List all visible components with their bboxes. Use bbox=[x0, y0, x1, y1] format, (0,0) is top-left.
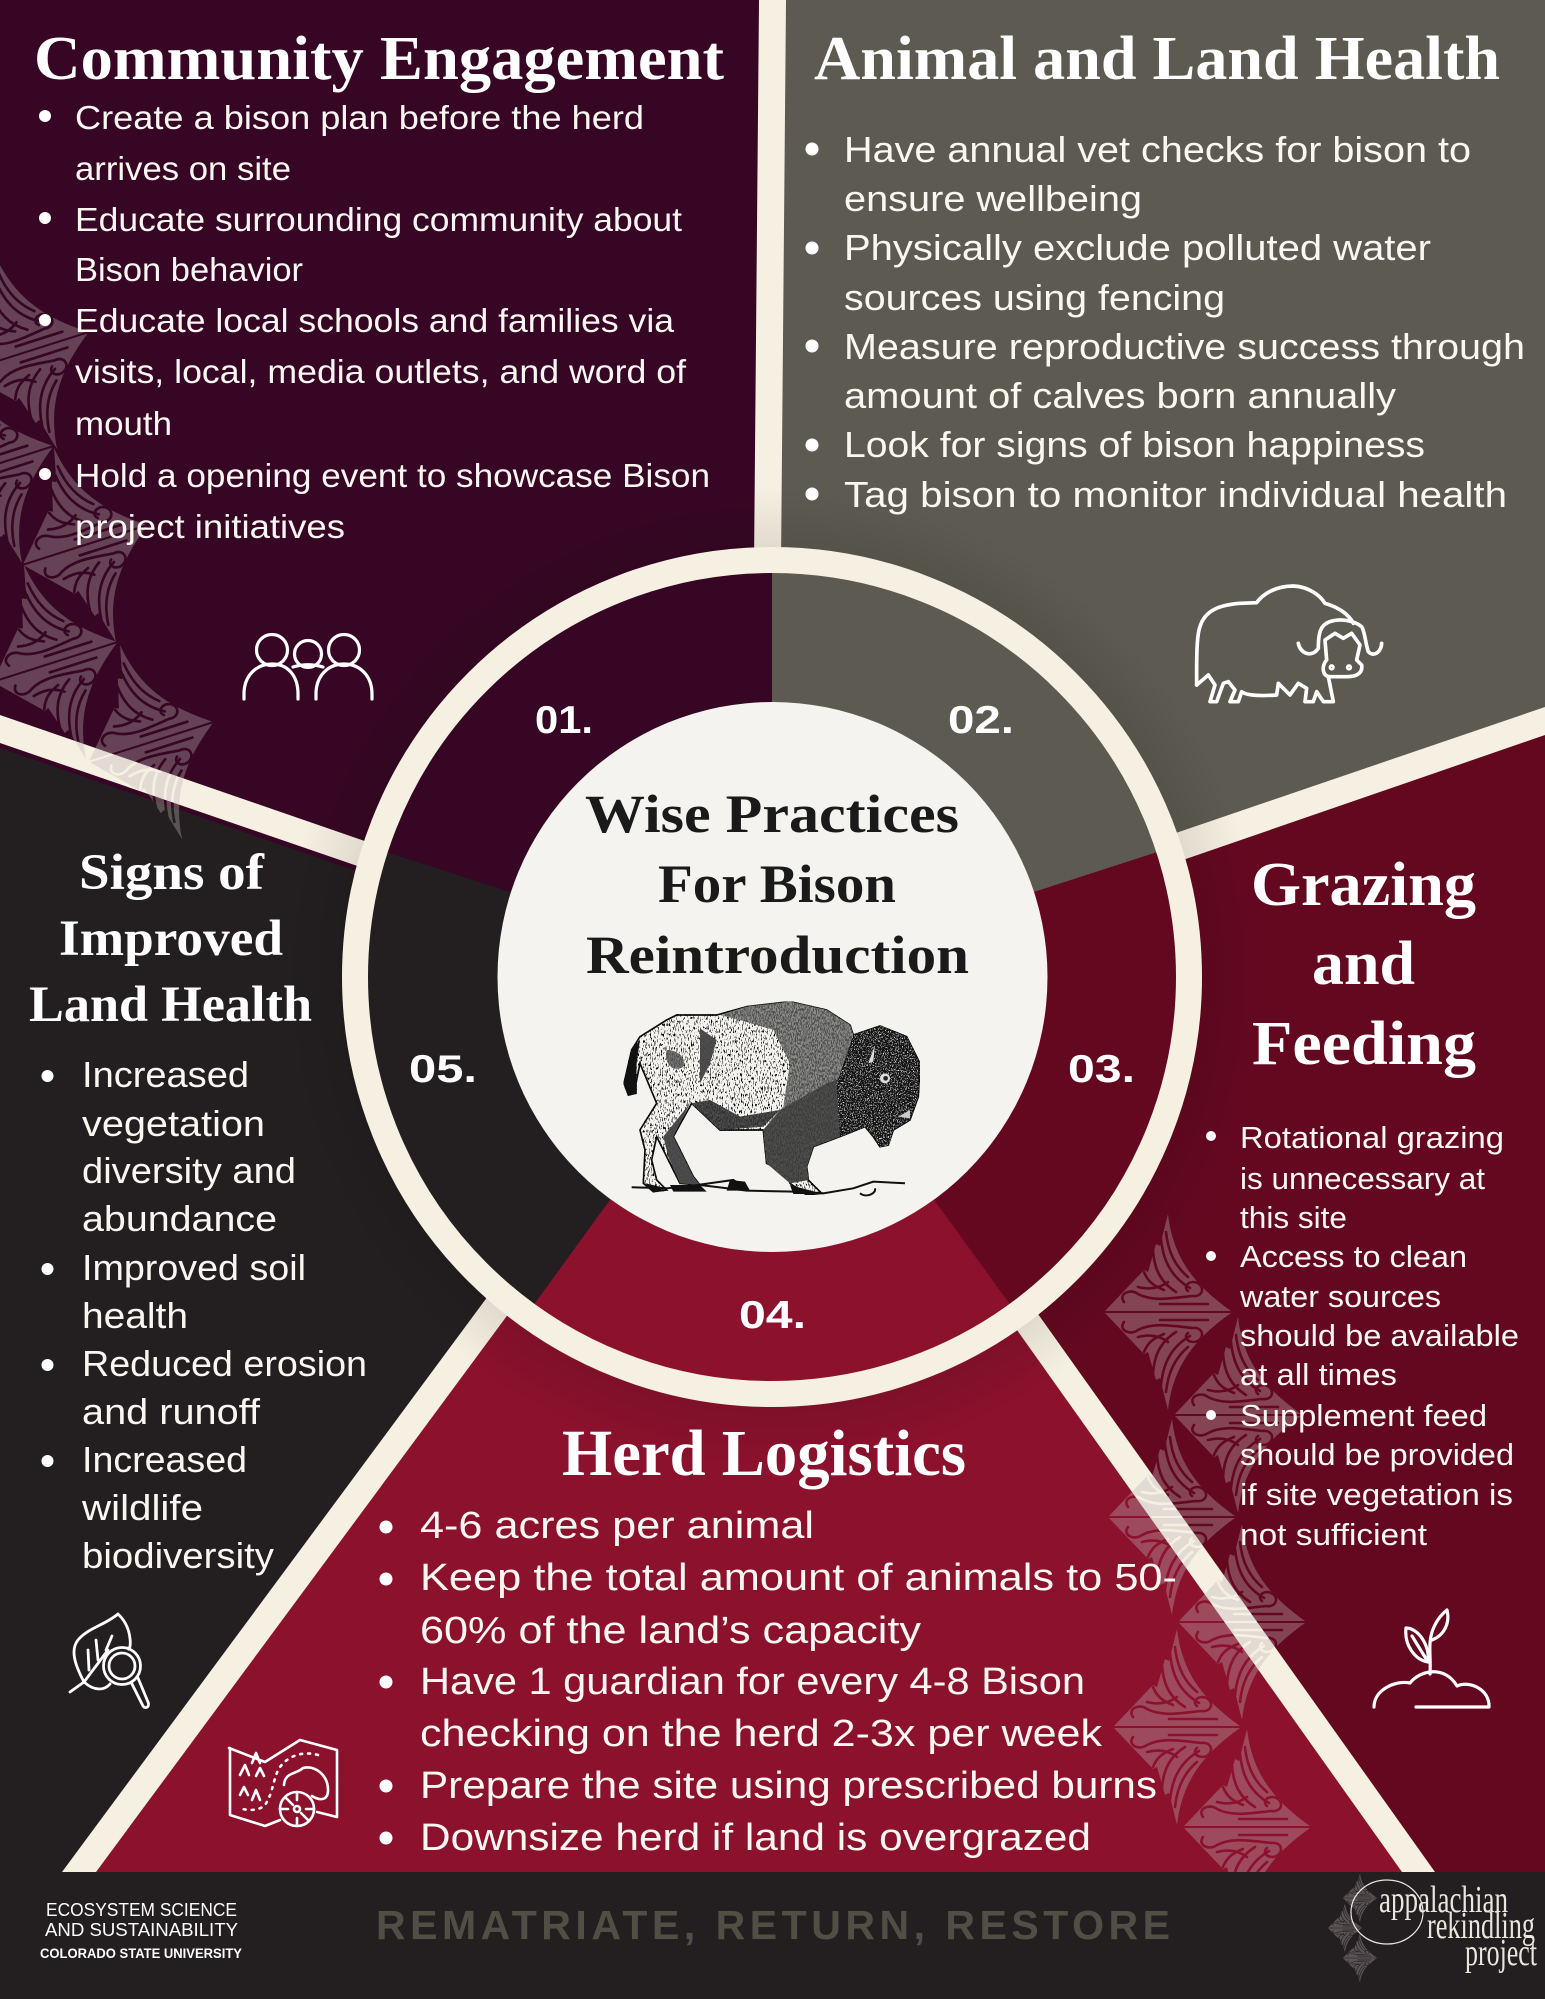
list: signs of improved land health: vegetation bbox=[82, 1103, 265, 1144]
footer: university logo bbox=[40, 1900, 242, 1961]
list: animal and land health: Look for signs of bison happiness bbox=[844, 424, 1425, 465]
list: animal and land health bbox=[806, 129, 1525, 515]
list: grazing and feeding: Access to clean bbox=[1240, 1239, 1467, 1274]
heading: grazing and feeding: and bbox=[1312, 930, 1415, 998]
icon: map with compass bbox=[229, 1740, 337, 1826]
heading: signs of improved land health: Land Health bbox=[29, 977, 312, 1033]
list: herd logistics: Prepare the site using prescribed burns bbox=[420, 1765, 1157, 1807]
list: signs of improved land health: Improved soil bbox=[82, 1247, 306, 1288]
center title: Wise Practices bbox=[585, 784, 959, 844]
panel: herd logistics background bbox=[79, 977, 1418, 1872]
wheel number 04: 04. bbox=[739, 1294, 806, 1337]
list: community engagement: mouth bbox=[75, 405, 172, 442]
list: animal and land health: ensure wellbeing bbox=[844, 178, 1142, 219]
list: grazing and feeding: Rotational grazing bbox=[1240, 1120, 1504, 1155]
list: signs of improved land health: wildlife bbox=[81, 1487, 203, 1528]
panel: animal and land health background bbox=[772, 0, 1545, 977]
footer: tagline: REMATRIATE, RETURN, RESTORE bbox=[376, 1902, 1170, 1948]
list: herd logistics: Keep the total amount of animals to 50- bbox=[420, 1557, 1177, 1599]
list: animal and land health: Measure reproductive success through bbox=[844, 326, 1525, 367]
heading: grazing and feeding: Feeding bbox=[1252, 1010, 1476, 1078]
list: herd logistics: 4-6 acres per animal bbox=[420, 1505, 814, 1547]
list: community engagement: visits, local, media outlets, and word of bbox=[75, 353, 687, 390]
list: grazing and feeding: should be available bbox=[1240, 1318, 1519, 1353]
list: grazing and feeding: Supplement feed bbox=[1240, 1398, 1487, 1433]
bison illustration bbox=[624, 1002, 920, 1195]
list: grazing and feeding bbox=[1206, 1120, 1519, 1552]
heading: signs of improved land health: Signs of bbox=[79, 845, 265, 901]
list: community engagement: Educate local schools and families via bbox=[75, 302, 675, 339]
footer: appalachian rekindling project logo bbox=[1326, 1872, 1537, 1984]
list: grazing and feeding: not sufficient bbox=[1240, 1517, 1427, 1552]
heading: grazing and feeding: Grazing bbox=[1251, 851, 1476, 919]
list: animal and land health: Physically exclude polluted water bbox=[844, 227, 1431, 268]
list: community engagement: Create a bison plan before the herd bbox=[75, 99, 644, 136]
heading: animal and land health: Animal and Land Health bbox=[814, 25, 1500, 93]
wheel number 01: 01. bbox=[535, 699, 593, 742]
list: animal and land health: Tag bison to monitor individual health bbox=[844, 474, 1507, 515]
list: community engagement: arrives on site bbox=[75, 150, 291, 187]
icon: three people bbox=[244, 634, 372, 699]
list: community engagement bbox=[39, 99, 710, 545]
list: grazing and feeding: this site bbox=[1240, 1200, 1347, 1235]
icon: leaf with magnifier bbox=[70, 1614, 149, 1708]
list: herd logistics: Have 1 guardian for every 4-8 Bison bbox=[420, 1661, 1085, 1703]
list: community engagement: Bison behavior bbox=[75, 251, 303, 288]
footer: university logo: ECOSYSTEM SCIENCE bbox=[46, 1900, 237, 1920]
heading: signs of improved land health bbox=[29, 845, 312, 1033]
list: herd logistics bbox=[380, 1505, 1177, 1859]
list: herd logistics: 60% of the land’s capacity bbox=[420, 1610, 921, 1652]
list: community engagement: Educate surrounding community about bbox=[75, 201, 682, 238]
wheel number 02: 02. bbox=[948, 699, 1014, 742]
list: animal and land health: Have annual vet checks for bison to bbox=[844, 129, 1471, 170]
list: herd logistics: checking on the herd 2-3x per week bbox=[420, 1713, 1103, 1755]
heading: herd logistics: Herd Logistics bbox=[562, 1417, 966, 1490]
list: signs of improved land health: abundance bbox=[82, 1198, 277, 1239]
list: signs of improved land health: diversity and bbox=[82, 1150, 296, 1191]
list: signs of improved land health: Increased bbox=[82, 1054, 249, 1095]
heading: grazing and feeding bbox=[1251, 851, 1476, 1078]
list: animal and land health: sources using fencing bbox=[844, 277, 1225, 318]
panel: signs of improved land health background bbox=[0, 748, 772, 1872]
center title: Reintroduction bbox=[586, 925, 969, 985]
list: herd logistics: Downsize herd if land is overgrazed bbox=[420, 1817, 1091, 1859]
wheel number 03: 03. bbox=[1068, 1048, 1135, 1091]
footer band bbox=[0, 1872, 1545, 1999]
center title bbox=[585, 784, 969, 985]
footer: university logo: COLORADO STATE UNIVERSITY bbox=[40, 1946, 242, 1961]
list: grazing and feeding: water sources bbox=[1239, 1279, 1441, 1314]
icon: bison outline bbox=[1197, 586, 1382, 702]
heading: signs of improved land health: Improved bbox=[59, 911, 283, 967]
list: signs of improved land health: and runoff bbox=[82, 1391, 261, 1432]
ring shadow bbox=[282, 487, 1262, 1467]
wheel number 05: 05. bbox=[409, 1048, 477, 1091]
list: grazing and feeding: should be provided bbox=[1240, 1437, 1514, 1472]
wheel inner wedges bbox=[380, 573, 1176, 1381]
footer: university logo: AND SUSTAINABILITY bbox=[45, 1920, 238, 1940]
list: grazing and feeding: is unnecessary at bbox=[1240, 1161, 1485, 1196]
decorative motif: upper left bbox=[0, 226, 252, 868]
cream wheel ring bbox=[355, 560, 1189, 1394]
list: signs of improved land health: health bbox=[82, 1295, 188, 1336]
list: community engagement: project initiatives bbox=[75, 508, 345, 545]
list: signs of improved land health bbox=[42, 1054, 367, 1576]
list: community engagement: Hold a opening event to showcase Bison bbox=[75, 457, 710, 494]
center circle bbox=[498, 702, 1048, 1252]
panel: community engagement background bbox=[0, 0, 772, 977]
heading: community engagement: Community Engagement bbox=[34, 25, 724, 93]
center title: For Bison bbox=[658, 854, 896, 914]
decorative motif: lower right bbox=[1098, 1207, 1317, 1932]
list: animal and land health: amount of calves born annually bbox=[844, 375, 1396, 416]
list: signs of improved land health: Reduced erosion bbox=[82, 1343, 367, 1384]
list: signs of improved land health: biodiversity bbox=[82, 1535, 274, 1576]
list: grazing and feeding: at all times bbox=[1240, 1357, 1397, 1392]
panel: grazing and feeding background bbox=[772, 721, 1545, 1872]
icon: sprout in soil bbox=[1374, 1610, 1489, 1707]
list: grazing and feeding: if site vegetation is bbox=[1240, 1477, 1513, 1512]
list: signs of improved land health: Increased bbox=[82, 1439, 247, 1480]
